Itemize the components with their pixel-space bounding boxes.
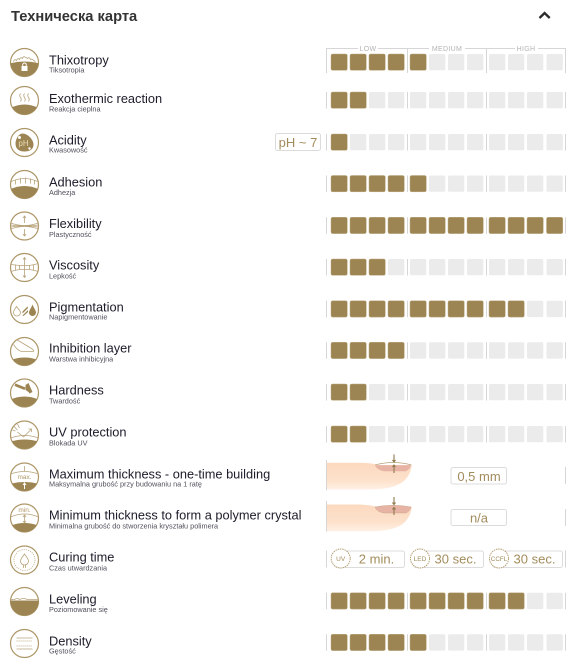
- icon: adhesion: [10, 170, 40, 200]
- value: CCFL: [490, 549, 562, 568]
- icon: curing time: [10, 546, 38, 574]
- value: UV: [331, 549, 404, 568]
- name: Thixotropy: [49, 52, 109, 68]
- icon: flexibility: [10, 212, 38, 240]
- row: adhesion: [10, 170, 566, 200]
- name: Curing time: [49, 550, 114, 565]
- row: UV protection: [10, 421, 566, 450]
- subtitle: Gęstość: [49, 647, 76, 656]
- value: CCFL: CCFL: [491, 556, 508, 563]
- scale header: low, medium, high: HIGH: [517, 46, 535, 53]
- icon: hardness: [10, 379, 40, 408]
- icon: minimum thickness: min.: [18, 507, 31, 514]
- icon: maximum thickness: [10, 463, 40, 492]
- name: UV protection: [49, 425, 127, 440]
- icon: leveling: [10, 588, 40, 616]
- row: exothermic reaction: [10, 86, 566, 116]
- value: min thickness: [451, 510, 506, 526]
- name: Density: [49, 633, 92, 648]
- bar: 5 of 12: [326, 634, 566, 651]
- subtitle: Minimalna grubość do stworzenia kryształu polimera: [49, 522, 219, 531]
- subtitle: Twardość: [49, 397, 81, 406]
- icon: exothermic: [10, 86, 40, 116]
- value: LED: [410, 549, 484, 568]
- bar: 10 of 12: [326, 301, 566, 317]
- bar: 12 of 12: [326, 217, 566, 234]
- value: UV: UV: [336, 556, 346, 563]
- row: hardness: [10, 379, 566, 408]
- bar: 2 of 12: [326, 92, 566, 108]
- bar: 5 of 12: [326, 176, 566, 192]
- icon: UV protection: [10, 421, 40, 450]
- name: Exothermic reaction: [49, 91, 162, 106]
- subtitle: Tiksotropia: [49, 66, 85, 75]
- illustration: finger with thin layer: [326, 497, 412, 532]
- name: Maximum thickness - one-time building: [49, 467, 270, 482]
- icon: inhibition layer: [10, 338, 40, 366]
- icon: acidity: pH: [18, 139, 29, 148]
- subtitle: Adhezja: [49, 188, 76, 197]
- scale header: low, medium, high: LOW: [360, 46, 377, 53]
- row: flexibility: [10, 212, 566, 240]
- value: pH: pH ~ 7: [279, 135, 317, 150]
- subtitle: Lepkość: [49, 272, 77, 281]
- bar: 2 of 12: [326, 426, 566, 442]
- value: max thickness: 0,5 mm: [457, 469, 501, 484]
- icon: viscosity: [10, 254, 38, 282]
- row: minimum thickness: [10, 497, 566, 533]
- subtitle: Warstwa inhibicyjna: [49, 355, 114, 364]
- row: acidity: [10, 128, 566, 156]
- subtitle: Reakcja cieplna: [49, 105, 101, 114]
- name: Pigmentation: [49, 300, 124, 315]
- name: Adhesion: [49, 175, 102, 190]
- row: maximum thickness: [10, 454, 566, 492]
- value: min thickness: n/a: [470, 510, 489, 526]
- subtitle: Kwasowość: [49, 146, 88, 155]
- value: LED: LED: [414, 556, 427, 563]
- subtitle: Poziomowanie się: [49, 605, 108, 614]
- scale header: low, medium, high: [326, 46, 566, 73]
- icon: maximum thickness: max.: [17, 474, 32, 481]
- icon: density: [10, 630, 38, 658]
- scale header: low, medium, high: MEDIUM: [432, 46, 462, 53]
- row: thixotropy: [10, 48, 563, 78]
- bar: 2 of 12: [326, 384, 566, 400]
- subtitle: Plastyczność: [49, 230, 92, 239]
- curing values: [326, 549, 566, 568]
- value: CCFL: 30 sec.: [514, 552, 555, 566]
- row: density: [10, 630, 566, 658]
- name: Viscosity: [49, 258, 100, 272]
- value: LED: 30 sec.: [435, 552, 476, 566]
- subtitle: Blokada UV: [49, 439, 88, 448]
- name: Acidity: [49, 132, 87, 148]
- name: Hardness: [49, 383, 104, 398]
- subtitle: Czas utwardzania: [49, 564, 108, 573]
- bar: 1 of 12: [326, 134, 566, 150]
- row: viscosity: [10, 254, 566, 282]
- icon: pigmentation: [10, 296, 38, 324]
- bar: 3 of 12: [326, 259, 566, 276]
- icon: acidity: [10, 128, 38, 156]
- subtitle: Napigmentowanie: [49, 313, 107, 322]
- icon: thixotropy: [10, 48, 40, 78]
- icon: minimum thickness: [10, 504, 40, 533]
- value: UV: 2 min.: [359, 552, 394, 566]
- title: Техническа карта: [11, 9, 138, 25]
- bar: 4 of 12: [326, 342, 566, 359]
- illustration: finger with thick layer: [326, 454, 412, 490]
- subtitle: Maksymalna grubość przy budowaniu na 1 ratę: [49, 480, 202, 489]
- name: Flexibility: [49, 216, 102, 231]
- row: leveling: [10, 588, 566, 616]
- bar: 5 of 12: [331, 54, 563, 70]
- name: Leveling: [49, 592, 97, 607]
- row: curing time: [10, 546, 566, 574]
- icon: collapse chevron: [540, 13, 550, 18]
- name: Minimum thickness to form a polymer crystal: [49, 508, 301, 523]
- row: inhibition layer: [10, 338, 566, 366]
- row: pigmentation: [10, 296, 566, 324]
- name: Inhibition layer: [49, 341, 132, 356]
- bar: 10 of 12: [326, 593, 566, 609]
